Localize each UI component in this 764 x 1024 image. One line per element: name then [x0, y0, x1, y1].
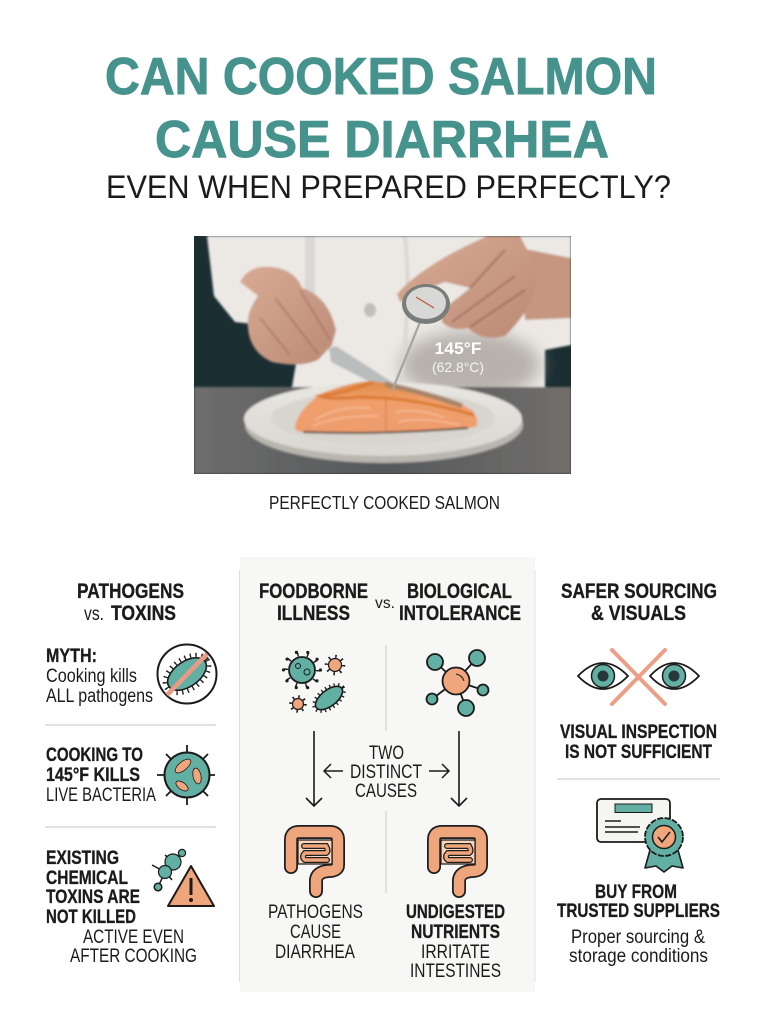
text: cooking kills bacteria: COOKING TO: [46, 745, 143, 766]
label: two distinct causes: CAUSES: [355, 781, 417, 802]
heading: biological intolerance: INTOLERANCE: [399, 602, 521, 625]
text: cooking kills bacteria: [46, 745, 156, 806]
salmon fillet: [295, 381, 477, 433]
icon: intestine left: [291, 832, 338, 891]
text: cooking kills bacteria: 145°F KILLS: [46, 765, 140, 786]
photo caption: PERFECTLY COOKED SALMON: [269, 493, 500, 513]
right forearm, hand: [520, 248, 571, 320]
text: undigested nutrients irritate intestines: UNDIGESTED: [406, 902, 505, 923]
chef coat: [207, 236, 571, 387]
text: myth: ALL pathogens: [46, 686, 153, 707]
heading: foodborne illness: [259, 580, 368, 625]
text: undigested nutrients irritate intestines: [406, 902, 505, 982]
temperature label: [432, 342, 484, 375]
heading: safer sourcing: SAFER SOURCING: [561, 580, 717, 603]
text: chemical toxins: NOT KILLED: [46, 907, 136, 928]
heading: safer sourcing: & VISUALS: [591, 602, 686, 625]
text: proper sourcing: [569, 927, 708, 967]
panel: safer sourcing and visuals: [557, 580, 720, 967]
arrow: left: [324, 764, 343, 778]
text: pathogens cause diarrhea: [268, 902, 363, 963]
heading: biological intolerance: BIOLOGICAL: [407, 580, 512, 603]
text: cooking kills bacteria: LIVE BACTERIA: [46, 785, 156, 806]
temperature label: 145°F: [434, 339, 482, 358]
text: chemical toxins: EXISTING: [46, 848, 119, 869]
panel: foodborne illness vs biological intolerance: [240, 557, 535, 992]
heading: foodborne illness: FOODBORNE: [259, 580, 368, 603]
label: two distinct causes: [350, 743, 422, 802]
plate: [244, 420, 524, 465]
text: visual inspection: IS NOT SUFFICIENT: [565, 742, 712, 763]
text: chemical toxins: AFTER COOKING: [70, 946, 197, 967]
text: buy from trusted suppliers: TRUSTED SUPPLIERS: [557, 901, 720, 922]
text: visual inspection: VISUAL INSPECTION: [560, 722, 717, 743]
label: two distinct causes: TWO: [369, 743, 404, 764]
knife: [329, 346, 392, 388]
text: chemical toxins: ACTIVE EVEN: [83, 927, 184, 948]
temperature label: (62.8°C): [432, 359, 484, 375]
heading: biological intolerance: [399, 580, 521, 625]
heading: safer sourcing: [561, 580, 717, 625]
icon: bacteria: [157, 745, 215, 805]
text: pathogens cause diarrhea: DIARRHEA: [275, 942, 355, 963]
heading: pathogens vs toxins: [77, 580, 184, 625]
text: pathogens cause diarrhea: CAUSE: [290, 922, 341, 943]
icon: crossed-out bacterium: [158, 644, 216, 704]
heading: pathogens vs toxins: TOXINS: [111, 602, 176, 625]
icon: nutrient molecule: [426, 650, 488, 716]
icon: intestine right: [434, 832, 481, 891]
subtitle: EVEN WHEN PREPARED PERFECTLY?: [106, 169, 671, 205]
panel: pathogens vs toxins: [45, 580, 216, 967]
text: undigested nutrients irritate intestines: INTESTINES: [410, 961, 501, 982]
photo: chef checking salmon temperature: [194, 236, 571, 474]
text: chemical toxins: TOXINS ARE: [46, 887, 140, 908]
label: two distinct causes: DISTINCT: [350, 762, 422, 783]
text: proper sourcing: Proper sourcing &: [571, 927, 705, 948]
text: myth: [46, 646, 153, 707]
icon: crossed-out eyes: [578, 650, 699, 704]
text: buy from trusted suppliers: [557, 882, 720, 922]
text: myth: Cooking kills: [46, 666, 137, 687]
left arm and hand: [240, 267, 336, 365]
heading: foodborne illness: ILLNESS: [277, 602, 350, 625]
heading: pathogens vs toxins: PATHOGENS: [77, 580, 184, 603]
title: CAN COOKED SALMON: [105, 48, 657, 106]
arrow: right down: [451, 731, 467, 806]
text: chemical toxins: CHEMICAL: [46, 868, 128, 889]
text: buy from trusted suppliers: BUY FROM: [595, 882, 677, 903]
text: proper sourcing: storage conditions: [569, 946, 708, 967]
thermometer: [392, 284, 450, 391]
text: myth: MYTH:: [46, 646, 97, 667]
text: pathogens cause diarrhea: PATHOGENS: [268, 902, 363, 923]
arrow: right: [429, 764, 449, 778]
text: chemical toxins: [46, 848, 197, 967]
text: visual inspection: [560, 722, 717, 763]
vs label: vs.: [375, 595, 395, 612]
title: CAUSE DIARRHEA: [155, 111, 609, 169]
arrow: left down: [306, 731, 322, 806]
text: undigested nutrients irritate intestines: IRRITATE: [421, 942, 490, 963]
icon: pathogens cluster: [284, 652, 349, 716]
icon: toxin molecule and warning triangle: [152, 849, 214, 906]
text: undigested nutrients irritate intestines: NUTRIENTS: [411, 922, 500, 943]
title: [105, 48, 657, 169]
icon: certificate with badge: [597, 799, 683, 872]
heading: pathogens vs toxins: vs.: [84, 604, 104, 625]
counter: [194, 387, 571, 474]
